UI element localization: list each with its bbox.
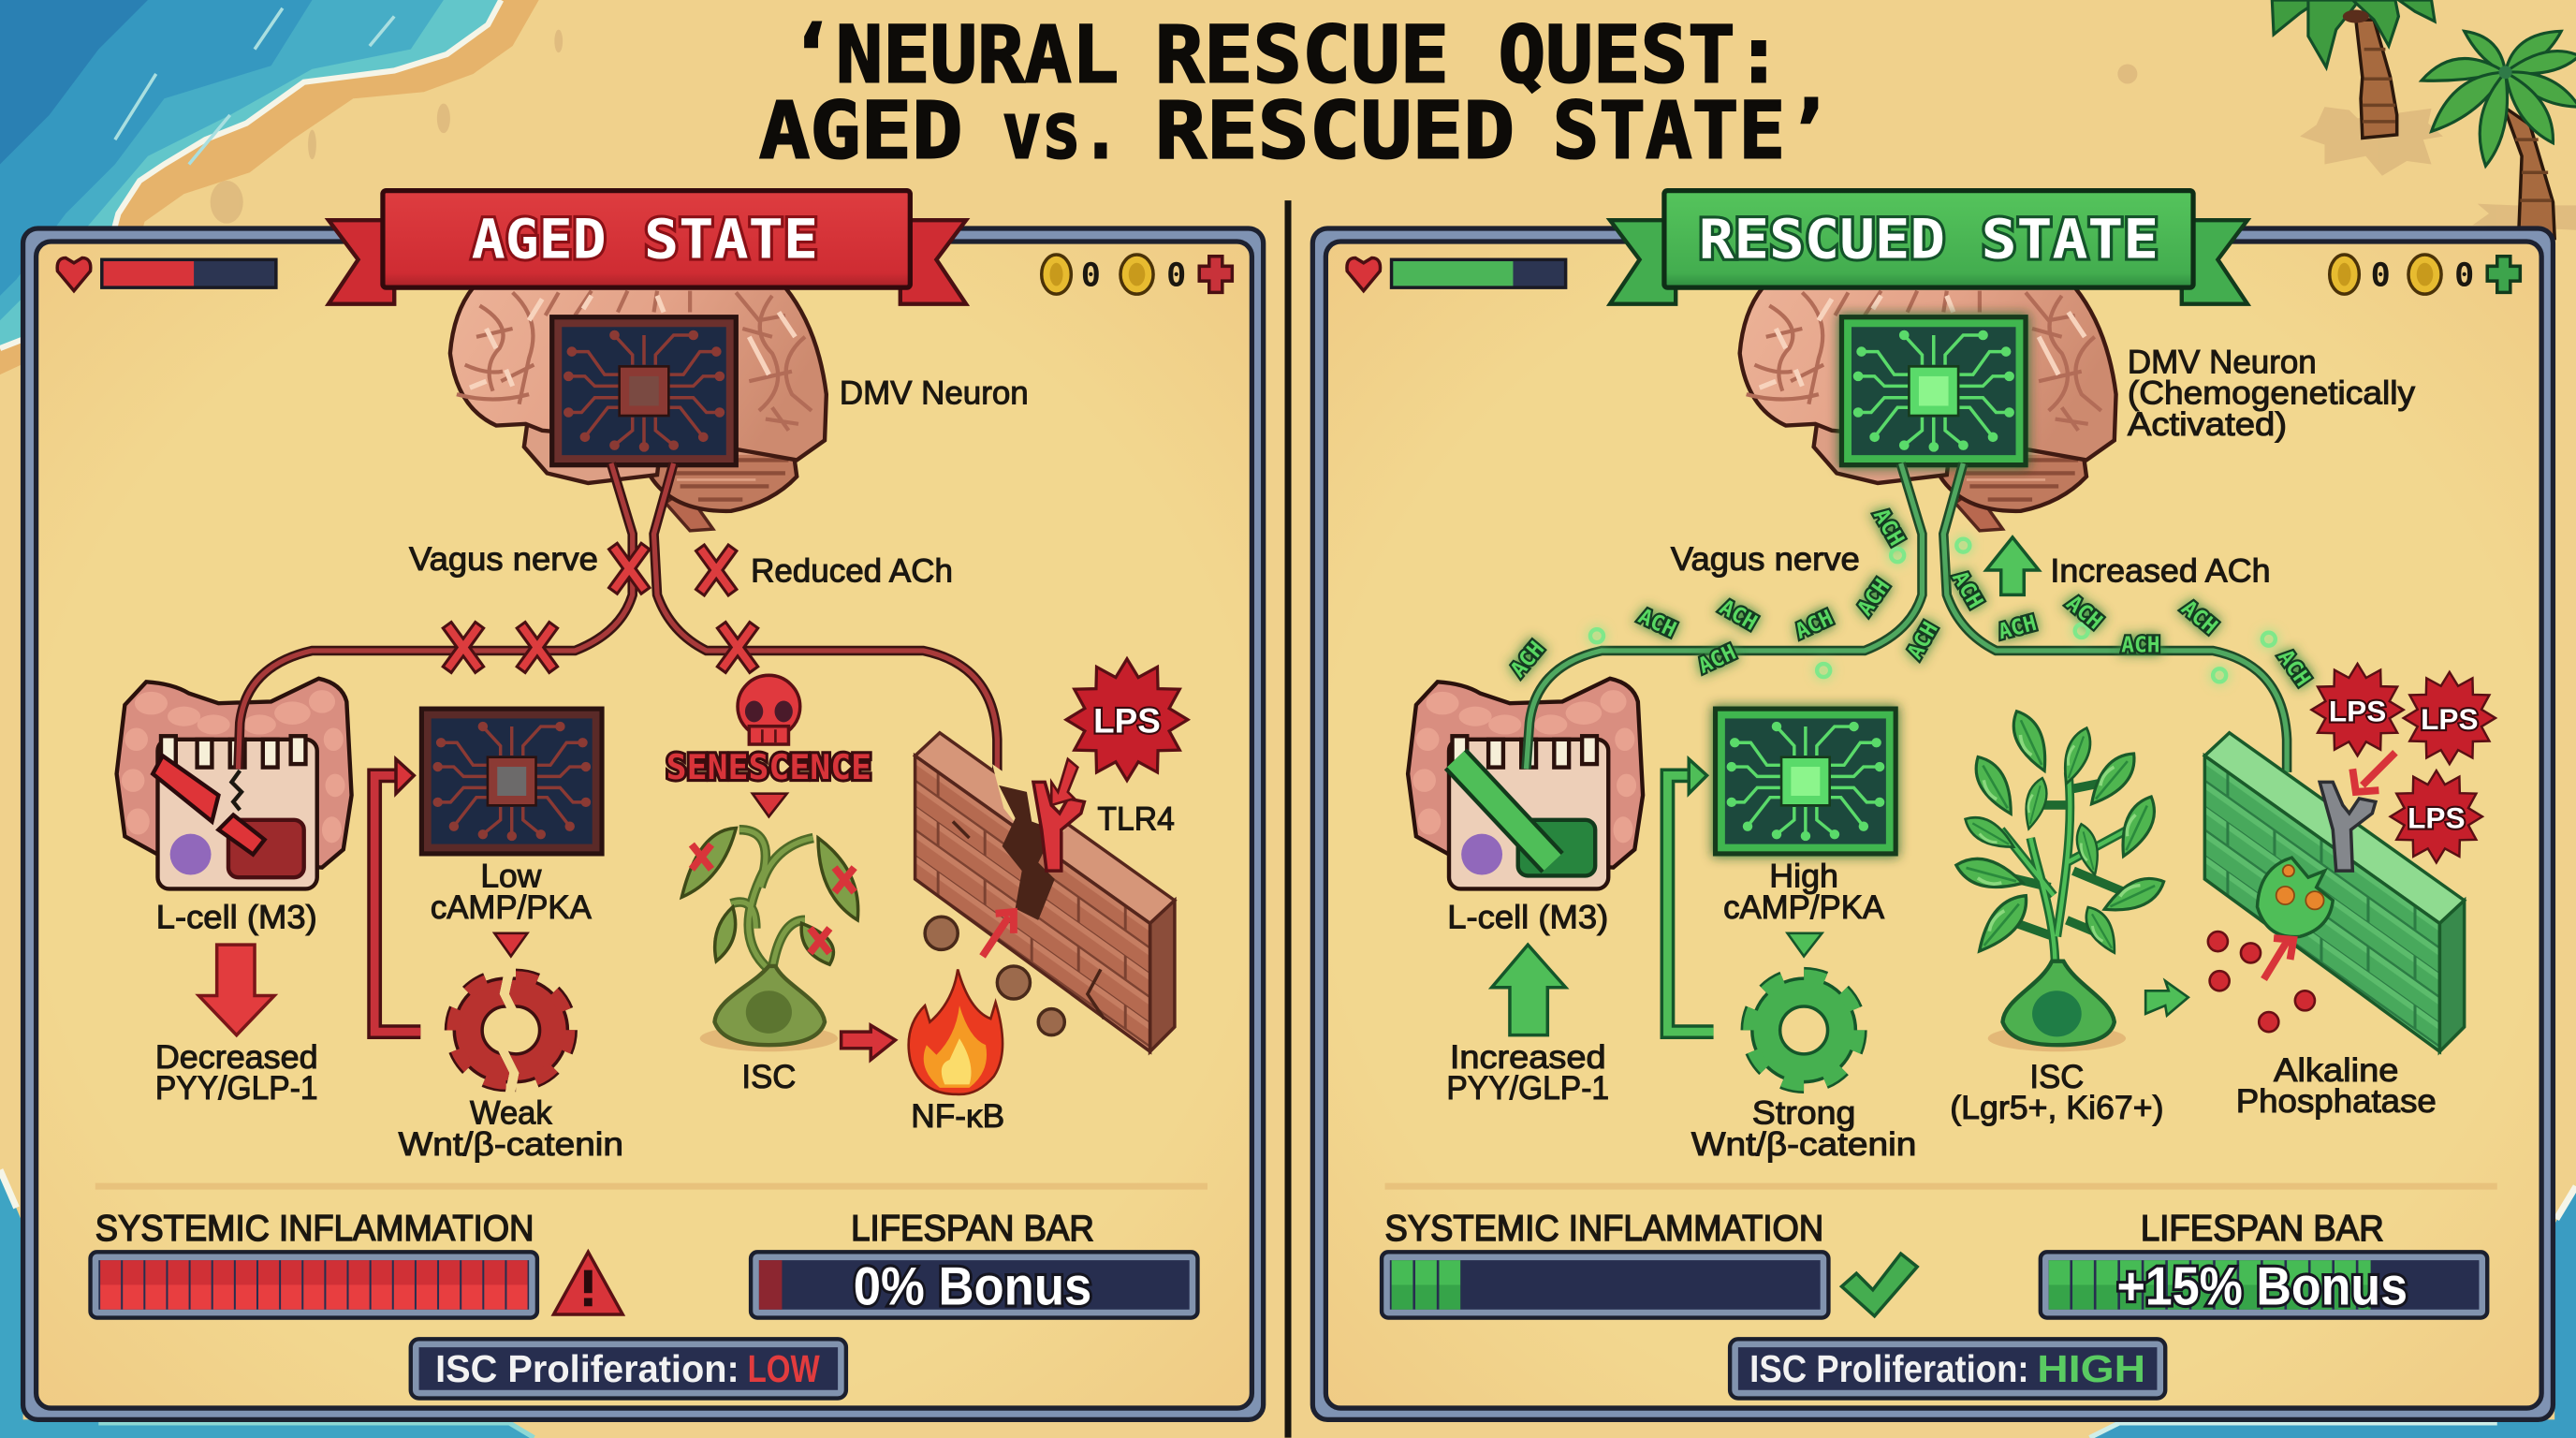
gear: strong Wnt bbox=[1749, 976, 1858, 1084]
brick wall: damaged bbox=[915, 733, 1175, 1051]
feedback arrow bbox=[374, 759, 420, 1032]
acetylcholine particles: ACH bbox=[1868, 505, 1909, 550]
ocean: bottom left bbox=[0, 1170, 534, 1438]
acetylcholine particles: ACH bbox=[2121, 634, 2159, 658]
icon: skull bbox=[738, 675, 800, 744]
hud: coins and lives bbox=[1042, 255, 1232, 294]
label: strong Wnt/beta-catenin bbox=[1691, 1094, 1916, 1163]
chip: high cAMP/PKA bbox=[1716, 709, 1895, 854]
acetylcholine particles: ACH bbox=[2176, 596, 2221, 639]
label: strong Wnt/beta-catenin: Wnt/β-catenin bbox=[1691, 1126, 1916, 1163]
panel: rescued state bbox=[1312, 191, 2553, 1419]
banner: aged state: STATE bbox=[644, 208, 818, 271]
banner: rescued state: RESCUED bbox=[1699, 208, 1945, 271]
acetylcholine particles: ACH bbox=[2061, 591, 2107, 635]
label: L-cell: L-cell (M3) bbox=[1447, 900, 1608, 936]
title: ‘NEURAL bbox=[788, 9, 1119, 101]
small arrow down bbox=[753, 794, 787, 816]
acetylcholine particles: ACH bbox=[1903, 618, 1943, 664]
hud: coins and lives: 0 bbox=[1166, 256, 1186, 294]
label: ISC markers: (Lgr5+, Ki67+) bbox=[1950, 1090, 2163, 1126]
banner: aged state bbox=[329, 191, 966, 304]
wilted plant: ISC bbox=[681, 829, 858, 1051]
label: decreased PYY/GLP-1: PYY/GLP-1 bbox=[155, 1070, 318, 1107]
chip: low cAMP/PKA bbox=[421, 709, 602, 854]
label: weak Wnt/beta-catenin: Wnt/β-catenin bbox=[399, 1126, 623, 1163]
hud: coins and lives bbox=[2330, 255, 2520, 294]
feedback arrow bbox=[1667, 759, 1714, 1032]
label: DMV neuron chemogenetically activated: (Chemogenetically bbox=[2128, 375, 2415, 412]
brain bbox=[1740, 287, 2116, 531]
icon: check mark bbox=[1841, 1254, 1917, 1316]
panel frame bbox=[1312, 228, 2553, 1419]
label: increased PYY/GLP-1: Increased bbox=[1450, 1039, 1606, 1076]
LPS fragments bbox=[2208, 932, 2315, 1032]
label: lifespan bar: LIFESPAN BAR bbox=[2141, 1209, 2384, 1249]
LPS toxin bbox=[1066, 659, 1188, 781]
inflammation bar bbox=[1382, 1252, 1828, 1318]
LPS toxin group bbox=[2311, 664, 2496, 862]
LPS toxin: LPS bbox=[1093, 702, 1161, 741]
label: alkaline phosphatase: Phosphatase bbox=[2236, 1083, 2437, 1120]
status divider bbox=[95, 1183, 1208, 1190]
label: L-cell: L-cell (M3) bbox=[156, 900, 317, 936]
label: systemic inflammation: SYSTEMIC INFLAMMATION bbox=[95, 1209, 534, 1249]
label: NF-kB: NF-κB bbox=[911, 1098, 1004, 1135]
title: RESCUE bbox=[1155, 9, 1449, 101]
title: QUEST: bbox=[1499, 9, 1782, 101]
label: weak Wnt/beta-catenin bbox=[399, 1094, 623, 1163]
lifespan bar: +15% Bonus bbox=[2116, 1256, 2408, 1316]
ISC proliferation status: LOW bbox=[748, 1347, 821, 1390]
label: decreased PYY/GLP-1 bbox=[155, 1039, 318, 1107]
vagus nerve bbox=[238, 463, 997, 772]
healthy plant: ISC bbox=[1953, 706, 2169, 1051]
hud: coins and lives: 0 bbox=[2371, 256, 2391, 294]
label: TLR4: TLR4 bbox=[1097, 800, 1175, 837]
ISC proliferation status: HIGH bbox=[2037, 1347, 2145, 1390]
label: reduced ACh: Reduced ACh bbox=[751, 552, 953, 589]
label: strong Wnt/beta-catenin: Strong bbox=[1752, 1094, 1855, 1131]
LPS toxin group: LPS bbox=[2421, 702, 2479, 736]
acetylcholine particles: ACH bbox=[1996, 611, 2039, 645]
palm tree: front bbox=[2422, 31, 2576, 238]
title: RESCUED bbox=[1155, 84, 1515, 176]
arrow: increased bbox=[1492, 945, 1566, 1035]
label: lifespan bar: LIFESPAN BAR bbox=[851, 1209, 1094, 1249]
panel frame bbox=[23, 228, 1264, 1419]
acetylcholine particles bbox=[1506, 505, 2315, 691]
panel: aged state bbox=[23, 191, 1264, 1419]
ocean: bottom right bbox=[2089, 1186, 2576, 1438]
icon: warning triangle bbox=[553, 1252, 622, 1314]
inflammation bar bbox=[91, 1252, 537, 1318]
palm tree: rear bbox=[2272, 0, 2435, 138]
chip: DMV neuron bbox=[552, 317, 736, 465]
label: high cAMP/PKA: High bbox=[1769, 858, 1838, 895]
banner: rescued state bbox=[1610, 191, 2247, 304]
label: ISC markers bbox=[1950, 1059, 2163, 1126]
label: DMV neuron chemogenetically activated: Activated) bbox=[2128, 406, 2287, 443]
banner: rescued state: STATE bbox=[1982, 208, 2159, 271]
acetylcholine particles: ACH bbox=[1694, 640, 1740, 679]
enzyme: alkaline phosphatase bbox=[2258, 858, 2333, 937]
small arrow down bbox=[1788, 933, 1822, 956]
small arrow down bbox=[494, 933, 527, 956]
LPS toxin group: LPS bbox=[2408, 801, 2466, 835]
vagus nerve bbox=[1526, 463, 2287, 772]
acetylcholine particles: ACH bbox=[1716, 595, 1761, 636]
hud: health bar bbox=[1347, 258, 1566, 291]
hud: coins and lives: 0 bbox=[2454, 256, 2474, 294]
lifespan bar bbox=[751, 1252, 1197, 1318]
label: increased ACh: Increased ACh bbox=[2050, 552, 2271, 589]
lifespan bar: 0% Bonus bbox=[854, 1256, 1091, 1316]
label: high cAMP/PKA: cAMP/PKA bbox=[1723, 889, 1885, 926]
label: weak Wnt/beta-catenin: Weak bbox=[470, 1094, 552, 1131]
chip: activated DMV neuron bbox=[1841, 317, 2026, 465]
arrow: ISC to NF-kB bbox=[842, 1025, 896, 1060]
brick wall: healthy bbox=[2204, 733, 2465, 1051]
arrow: breach bbox=[983, 912, 1014, 956]
label: vagus nerve: Vagus nerve bbox=[409, 541, 598, 578]
center divider bbox=[1284, 200, 1292, 1438]
receptor: TLR4 bbox=[1033, 782, 1084, 871]
label: vagus nerve: Vagus nerve bbox=[1671, 541, 1860, 578]
lifespan bar bbox=[2041, 1252, 2487, 1318]
title: vs. bbox=[1003, 84, 1120, 176]
ISC proliferation status bbox=[1730, 1339, 2165, 1399]
arrow: LPS to TLR4 bbox=[1051, 759, 1077, 805]
arrow: enzyme action bbox=[2264, 938, 2293, 979]
label: DMV neuron chemogenetically activated: DMV Neuron bbox=[2128, 344, 2317, 380]
ISC proliferation status: ISC Proliferation: bbox=[435, 1347, 739, 1390]
label: alkaline phosphatase bbox=[2236, 1052, 2437, 1120]
arrow: decreased bbox=[198, 945, 274, 1035]
arrow: small green bbox=[2145, 981, 2188, 1016]
acetylcholine particles: ACH bbox=[1792, 606, 1837, 644]
LPS toxin group: LPS bbox=[2329, 694, 2386, 727]
label: DMV neuron: DMV Neuron bbox=[840, 375, 1029, 412]
broken gear: weak Wnt bbox=[453, 977, 568, 1083]
label: ISC markers: ISC bbox=[2029, 1059, 2084, 1095]
arrow: LPS deflected bbox=[2352, 753, 2395, 792]
ISC proliferation status bbox=[411, 1339, 846, 1399]
label: increased PYY/GLP-1: PYY/GLP-1 bbox=[1446, 1070, 1609, 1107]
acetylcholine particles: ACH bbox=[1947, 567, 1987, 612]
label: decreased PYY/GLP-1: Decreased bbox=[155, 1039, 318, 1076]
arrow: increased ACh bbox=[1986, 537, 2039, 594]
brain bbox=[450, 287, 827, 531]
banner: aged state: AGED bbox=[472, 208, 607, 271]
label: high cAMP/PKA bbox=[1723, 858, 1885, 926]
label: ISC: ISC bbox=[741, 1059, 796, 1095]
hud: health bar bbox=[57, 258, 276, 291]
label: DMV neuron chemogenetically activated bbox=[2128, 344, 2415, 443]
L-cell in gut bbox=[117, 679, 352, 888]
blocked signal crosses bbox=[450, 550, 751, 666]
acetylcholine particles: ACH bbox=[1634, 604, 1680, 642]
title bbox=[759, 9, 1832, 176]
acetylcholine particles: ACH bbox=[1506, 637, 1549, 682]
ocean: top left shoreline bbox=[0, 0, 539, 374]
status divider bbox=[1385, 1183, 2497, 1190]
label: alkaline phosphatase: Alkaline bbox=[2274, 1052, 2398, 1089]
receptor: TLR4 grey bbox=[2320, 782, 2376, 871]
label: low cAMP/PKA bbox=[431, 858, 592, 926]
label: low cAMP/PKA: cAMP/PKA bbox=[431, 889, 592, 926]
icon: fire bbox=[909, 969, 1003, 1094]
label: increased PYY/GLP-1 bbox=[1446, 1039, 1609, 1107]
ISC proliferation status: ISC Proliferation: bbox=[1749, 1347, 2029, 1390]
L-cell in gut bbox=[1408, 679, 1643, 888]
acetylcholine particles: ACH bbox=[2273, 645, 2315, 691]
hud: coins and lives: 0 bbox=[1081, 256, 1101, 294]
title: AGED bbox=[759, 84, 962, 176]
label: senescence: SENESCENCE bbox=[666, 747, 871, 787]
rocks bbox=[925, 917, 1064, 1035]
sand blotches bbox=[211, 30, 2576, 230]
label: low cAMP/PKA: Low bbox=[480, 858, 542, 895]
title: STATE’ bbox=[1553, 84, 1832, 176]
acetylcholine particles: ACH bbox=[1853, 575, 1895, 621]
label: systemic inflammation: SYSTEMIC INFLAMMATION bbox=[1385, 1209, 1823, 1249]
